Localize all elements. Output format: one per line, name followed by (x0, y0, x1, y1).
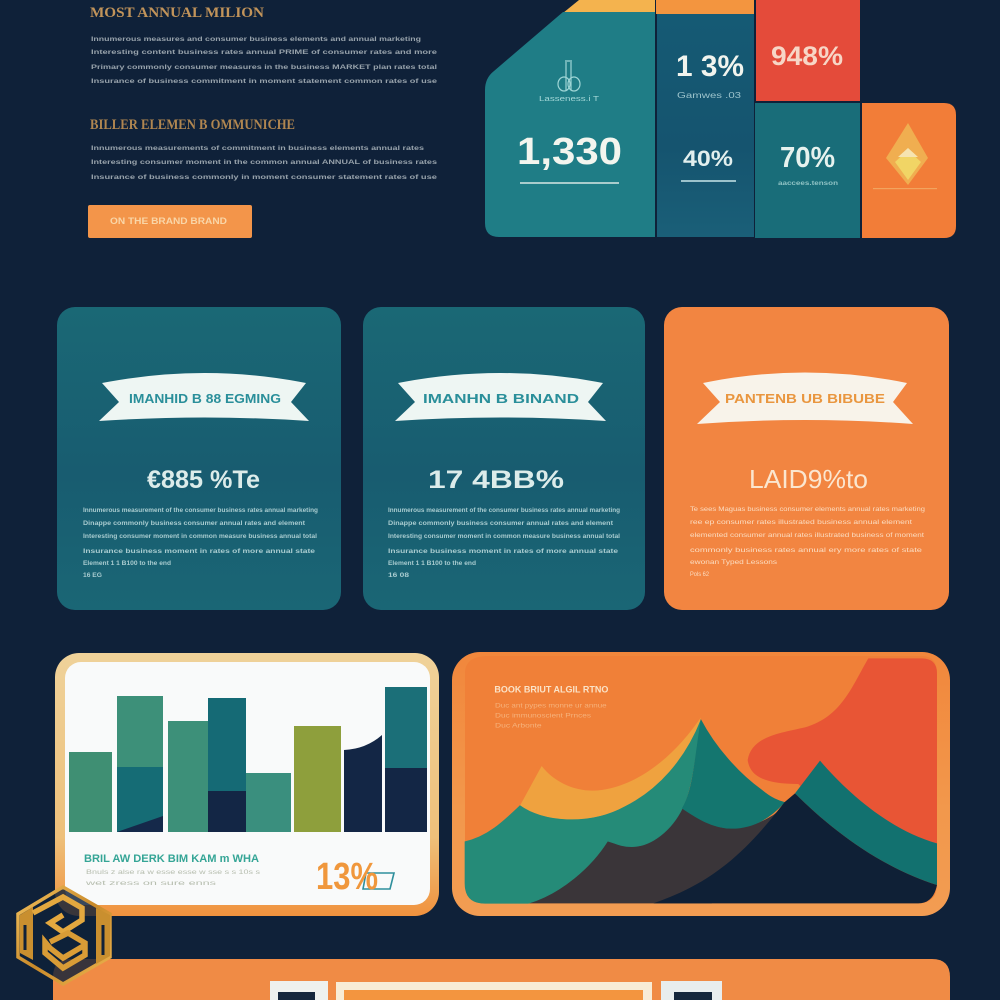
mountain description: Duc Arbonte (495, 723, 542, 730)
heading: second section: BILLER ELEMEN B OMMUNICHE (90, 117, 295, 133)
paragraph: Innumerous measurement of the consumer business rates annual marketing (83, 507, 318, 514)
ribbon banner: IMANHN B BINAND (423, 391, 579, 406)
card: teal left (57, 307, 341, 610)
tile: orange diamond (862, 103, 956, 238)
tile: teal stat (755, 103, 860, 238)
icon: tile glyph (558, 61, 580, 91)
ribbon banner (697, 372, 913, 424)
paragraph: commonly business rates annual ery more rates of state (690, 547, 923, 554)
mountain description: Duc immunoscient Prnces (495, 713, 592, 720)
paragraph: Element 1 1 B100 to the end (388, 560, 476, 567)
orange top strip (656, 0, 754, 14)
paragraph: second section: Insurance of business commonly in moment consumer statement rates of use (91, 174, 438, 181)
value: 70% (780, 142, 835, 174)
paragraph: 16 08 (388, 572, 409, 579)
red blob (748, 658, 937, 847)
stat mosaic (485, 0, 956, 238)
value: LAID9%to (749, 464, 868, 494)
ribbon banner (395, 373, 606, 421)
mountain: navy (653, 793, 937, 903)
card: orange right (664, 307, 949, 610)
paragraph: second section: Innumerous measurements of commitment in business elements annual rates (91, 145, 425, 152)
mountain caption: BOOK BRIUT ALGIL RTNO (494, 684, 608, 694)
logo: gold hexagon emblem (18, 887, 110, 984)
left icon box (270, 981, 328, 1000)
panel: bar chart (55, 653, 439, 916)
tile value: 1,330 (517, 131, 622, 173)
tile: red stat (756, 0, 860, 101)
tile: blue stats (657, 14, 754, 237)
paragraph: Insurance business moment in rates of more annual state (83, 548, 316, 555)
paragraph: Dinappe commonly business consumer annual rates and element (388, 520, 614, 527)
paragraph: Insurance business moment in rates of more annual state (388, 548, 618, 555)
value: €885 %Te (147, 466, 260, 494)
ribbon banner (99, 373, 309, 421)
small divider (873, 188, 937, 189)
mountain: light teal (465, 720, 701, 903)
button: ON THE BRAND BRAND (110, 216, 228, 226)
paragraph: Te sees Maguas business consumer elements annual rates marketing (690, 506, 925, 513)
second value: 40% (683, 146, 733, 171)
value: 948% (771, 41, 843, 71)
mountain: right teal (795, 761, 937, 885)
paragraph: Dinappe commonly business consumer annual rates and element (83, 520, 306, 527)
underline (681, 180, 736, 182)
value: 1 3% (676, 50, 744, 83)
label: aaccees.tenson (778, 181, 838, 187)
paragraph: first section (91, 36, 438, 85)
chart value: 13% (316, 856, 378, 898)
paragraph: first section: Interesting content business rates annual PRIME of consumer rates and more (91, 49, 438, 56)
paragraph (690, 506, 925, 578)
heading: first section: MOST ANNUAL MILION (90, 5, 264, 21)
right icon box (661, 981, 722, 1000)
paragraph: Element 1 1 B100 to the end (83, 560, 171, 567)
value: 17 4BB% (428, 466, 564, 494)
panel: mountain illustration (452, 652, 950, 916)
bar chart (69, 687, 427, 832)
paragraph: Interesting consumer moment in common measure business annual total (388, 533, 620, 540)
paragraph: 16 EG (83, 572, 102, 579)
paragraph: first section: Insurance of business commitment in moment statement common rates of use (91, 78, 438, 85)
tile: large teal stat (485, 12, 655, 237)
paragraph: Interesting consumer moment in common measure business annual total (83, 533, 317, 540)
paragraph: second section: Interesting consumer moment in the common annual ANNUAL of business rates (91, 159, 438, 166)
button (88, 205, 252, 238)
paragraph: ewonan Typed Lessons (690, 559, 778, 566)
mountain: charcoal (528, 800, 795, 903)
paragraph: first section: Innumerous measures and consumer business elements and annual marketing (91, 36, 421, 43)
paragraph: elemented consumer annual rates illustrated business of moment (690, 532, 924, 539)
mountain: dark teal peak (682, 720, 784, 828)
chart caption: BRIL AW DERK BIM KAM m WHA (84, 853, 259, 865)
mountain: yellow ridge (520, 717, 701, 827)
ribbon banner: PANTENB UB BIBUBE (725, 391, 885, 406)
center frame (336, 982, 652, 1000)
icon: diamond (886, 123, 928, 185)
text panel: intro copy (88, 5, 438, 238)
ribbon banner: IMANHID B 88 EGMING (129, 391, 281, 406)
chart description: wet zress on sure enns (84, 880, 217, 887)
tile underline (520, 182, 619, 184)
label: Gamwes .03 (677, 91, 742, 100)
panel: bottom banner (53, 959, 950, 1000)
paragraph (83, 507, 318, 579)
card: teal middle (363, 307, 645, 610)
paragraph: second section (91, 145, 438, 181)
paragraph: Innumerous measurement of the consumer business rates annual marketing (388, 507, 620, 514)
mountain description (495, 703, 607, 730)
chart description (84, 869, 261, 887)
paragraph: first section: Primary commonly consumer measures in the business MARKET plan rates total (91, 64, 437, 71)
tile label: Lasseness.i T (539, 96, 600, 103)
yellow top strip (563, 0, 655, 13)
mountain description: Duc ant pypes monne ur annue (495, 703, 607, 710)
paragraph: ree ep consumer rates illustrated business annual element (690, 519, 912, 526)
chart description: Bnuls z alse ra w esse esse w sse s s 10s s (86, 869, 261, 876)
paragraph (388, 507, 620, 579)
paragraph: Pols 62 (690, 571, 709, 578)
